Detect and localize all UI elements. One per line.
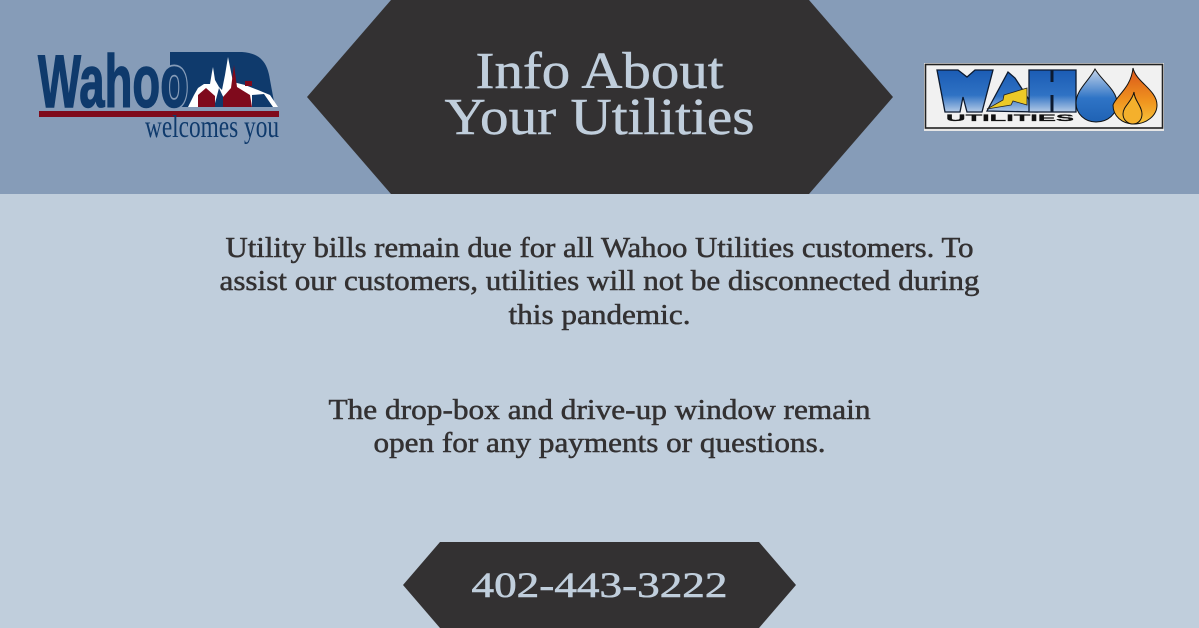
logo letters — [937, 70, 1076, 112]
title — [444, 43, 754, 146]
logo tagline: welcomes you — [145, 108, 279, 144]
title: Your Utilities — [444, 89, 754, 146]
phone number: 402-443-3222 — [472, 565, 728, 605]
title: Info About — [476, 43, 724, 100]
paragraph: bills remain due: this pandemic. — [508, 300, 690, 331]
title hexagon — [307, 0, 893, 194]
logo: Wahoo welcomes you: Wahoo — [38, 40, 188, 123]
paragraph: bills remain due: Utility bills remain due for all Wahoo Utilities customers. To — [226, 233, 974, 264]
icon: lightning bolt — [987, 88, 1027, 109]
logo red bar — [39, 111, 279, 117]
paragraph: drop-box: The drop-box and drive-up window remain — [328, 395, 870, 426]
logo skyline shape — [170, 52, 278, 107]
icon: water drop — [1076, 69, 1117, 122]
paragraph: drop-box — [328, 395, 870, 459]
phone badge — [403, 542, 796, 628]
logo plate — [924, 63, 1164, 131]
logo small text: UTILITIES — [946, 113, 1076, 124]
paragraph: bills remain due — [220, 233, 980, 331]
paragraph: bills remain due: assist our customers, utilities will not be disconnected during — [220, 266, 980, 297]
logo: Wahoo Utilities — [924, 63, 1164, 131]
icon: flame — [1113, 68, 1157, 124]
logo wordmark: Wahoo — [38, 40, 188, 123]
header band — [0, 0, 1199, 194]
paragraph: drop-box: open for any payments or questions. — [374, 428, 826, 459]
